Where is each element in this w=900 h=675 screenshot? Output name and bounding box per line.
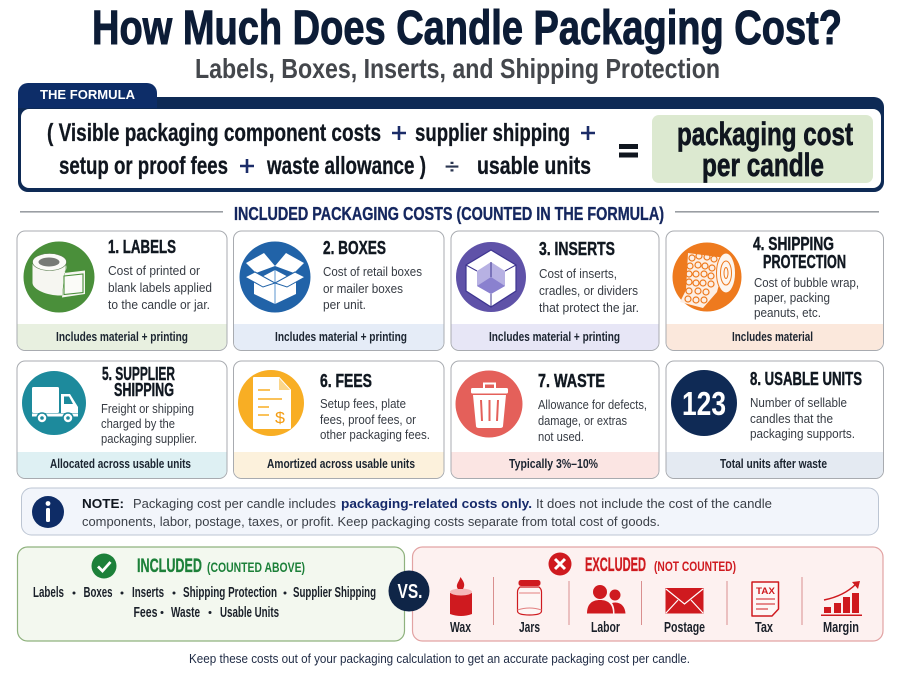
formula result: per candle xyxy=(702,147,824,183)
description: peanuts, etc. xyxy=(754,306,821,320)
note text: Packaging cost per candle includes xyxy=(133,497,336,511)
note text: packaging-related costs only. xyxy=(341,497,532,511)
note text: It does not include the cost of the candle xyxy=(536,497,772,511)
icon: open box xyxy=(240,242,310,312)
excluded item: labor xyxy=(587,585,626,636)
description: Cost of retail boxes xyxy=(323,265,422,279)
icon: label roll xyxy=(24,242,94,312)
panel: included xyxy=(18,547,404,641)
description: packaging supplier. xyxy=(101,432,197,446)
excluded item: postage: Postage xyxy=(664,620,705,636)
formula expression xyxy=(47,119,595,180)
included heading: (COUNTED ABOVE) xyxy=(207,559,305,575)
panel: excluded xyxy=(412,547,883,641)
heading: 6. FEES xyxy=(320,370,372,391)
note: Includes material + printing xyxy=(56,329,188,344)
formula expression: setup or proof fees xyxy=(59,152,228,180)
description: Number of sellable xyxy=(750,396,847,410)
excluded heading xyxy=(585,555,736,576)
heading: 5. SUPPLIER xyxy=(102,363,175,384)
formula expression: supplier shipping xyxy=(415,119,570,147)
VS badge: VS. xyxy=(398,581,422,603)
formula tab xyxy=(18,83,157,108)
note: Typically 3%–10% xyxy=(509,456,598,471)
note: Includes material + printing xyxy=(489,329,620,344)
description: Freight or shipping xyxy=(101,402,194,416)
section heading: INCLUDED PACKAGING COSTS (COUNTED IN THE FORMULA) xyxy=(234,204,664,224)
note: Includes material + printing xyxy=(275,329,407,344)
card: waste xyxy=(451,361,659,478)
icon: trash can xyxy=(456,370,522,438)
description: to the candle or jar. xyxy=(108,298,210,312)
description: Allowance for defects, xyxy=(538,398,647,412)
excluded item: postage xyxy=(664,588,705,636)
description xyxy=(754,276,859,320)
formula expression: usable units xyxy=(477,152,591,180)
formula result xyxy=(652,115,873,183)
description xyxy=(323,265,422,312)
description: not used. xyxy=(538,430,584,444)
description: charged by the xyxy=(101,417,175,431)
note: Total units after waste xyxy=(720,456,827,471)
footer note: Keep these costs out of your packaging calculation to get an accurate packaging cost per candle. xyxy=(189,651,690,666)
heading: PROTECTION xyxy=(763,251,846,272)
card: supplier shipping xyxy=(17,361,227,478)
note text: components, labor, postage, taxes, or profit. Keep packaging costs separate from total cost of goods. xyxy=(82,515,660,529)
heading: 2. BOXES xyxy=(323,237,386,258)
description: candles that the xyxy=(750,412,833,426)
included items: Fees xyxy=(134,604,158,621)
equals sign xyxy=(619,144,638,158)
included items: Waste xyxy=(171,604,200,621)
description: Cost of inserts, xyxy=(539,267,617,281)
description xyxy=(750,396,855,441)
note: Includes material xyxy=(732,329,813,344)
icon: fee document: $ xyxy=(275,410,285,427)
icon: check xyxy=(92,554,116,578)
heading: SHIPPING xyxy=(114,379,174,400)
included items: Boxes xyxy=(84,584,112,601)
heading xyxy=(753,233,846,272)
description: blank labels applied xyxy=(108,281,212,295)
included items: Supplier Shipping xyxy=(293,584,376,601)
heading: 7. WASTE xyxy=(538,370,605,391)
heading xyxy=(102,363,175,400)
excluded heading: EXCLUDED xyxy=(585,555,646,576)
description xyxy=(320,397,430,442)
description: paper, packing xyxy=(754,291,830,305)
note text: NOTE: xyxy=(82,497,124,511)
excluded item: jars xyxy=(518,580,542,636)
icon: bubble wrap roll xyxy=(672,242,742,312)
excluded item: labor: Labor xyxy=(591,620,620,636)
icon: insert cradle xyxy=(456,242,526,312)
card: fees xyxy=(234,361,444,478)
icon: info xyxy=(32,496,64,528)
icon: cross xyxy=(548,552,572,576)
note: Allocated across usable units xyxy=(50,456,191,471)
icon: truck xyxy=(22,371,86,435)
card: inserts xyxy=(451,231,659,350)
description: packaging supports. xyxy=(750,427,855,441)
included items: Usable Units xyxy=(220,604,279,621)
description: Setup fees, plate xyxy=(320,397,406,411)
excluded item: tax: Tax xyxy=(755,620,773,636)
VS badge xyxy=(388,570,430,612)
panel: formula xyxy=(18,83,884,192)
card: labels xyxy=(17,231,227,350)
icon: 123 badge xyxy=(671,370,737,436)
formula tab: THE FORMULA xyxy=(40,87,136,102)
card: boxes xyxy=(234,231,444,350)
excluded item: wax xyxy=(450,577,472,636)
formula expression: waste allowance ) xyxy=(266,152,426,180)
description: or mailer boxes xyxy=(323,282,403,296)
description xyxy=(101,402,197,446)
excluded item: tax: TAX xyxy=(756,586,775,596)
description xyxy=(538,398,647,444)
card: usable units xyxy=(666,361,884,478)
note text xyxy=(82,497,772,529)
icon: 123 badge: 123 xyxy=(682,385,726,422)
card: shipping protection xyxy=(666,231,884,350)
included items: Labels xyxy=(33,584,64,601)
heading: 3. INSERTS xyxy=(539,238,615,259)
included items: Inserts xyxy=(132,584,164,601)
description: other packaging fees. xyxy=(320,428,430,442)
description: Cost of printed or xyxy=(108,264,200,278)
included items xyxy=(33,584,376,621)
icon: fee document xyxy=(238,370,304,436)
included items: Shipping Protection xyxy=(183,584,277,601)
note: Amortized across usable units xyxy=(267,456,415,471)
formula expression: ÷ xyxy=(445,157,459,178)
description: damage, or extras xyxy=(538,414,627,428)
excluded item: margin xyxy=(821,581,862,636)
description: that protect the jar. xyxy=(539,301,639,315)
excluded item: margin: Margin xyxy=(823,620,859,636)
heading: 4. SHIPPING xyxy=(753,233,834,254)
description: per unit. xyxy=(323,298,366,312)
included heading: INCLUDED xyxy=(137,556,202,577)
description: fees, proof fees, or xyxy=(320,413,416,427)
note panel xyxy=(22,488,878,535)
description: Cost of bubble wrap, xyxy=(754,276,859,290)
excluded item: wax: Wax xyxy=(450,620,471,636)
subtitle: Labels, Boxes, Inserts, and Shipping Protection xyxy=(195,53,720,84)
excluded item: jars: Jars xyxy=(519,620,540,636)
description xyxy=(108,264,212,312)
heading: 1. LABELS xyxy=(108,236,176,257)
excluded heading: (NOT COUNTED) xyxy=(654,558,736,574)
description xyxy=(539,267,639,315)
formula expression: ( Visible packaging component costs xyxy=(47,119,381,147)
description: cradles, or dividers xyxy=(539,284,638,298)
included heading xyxy=(137,556,305,577)
excluded item: tax xyxy=(752,582,778,636)
